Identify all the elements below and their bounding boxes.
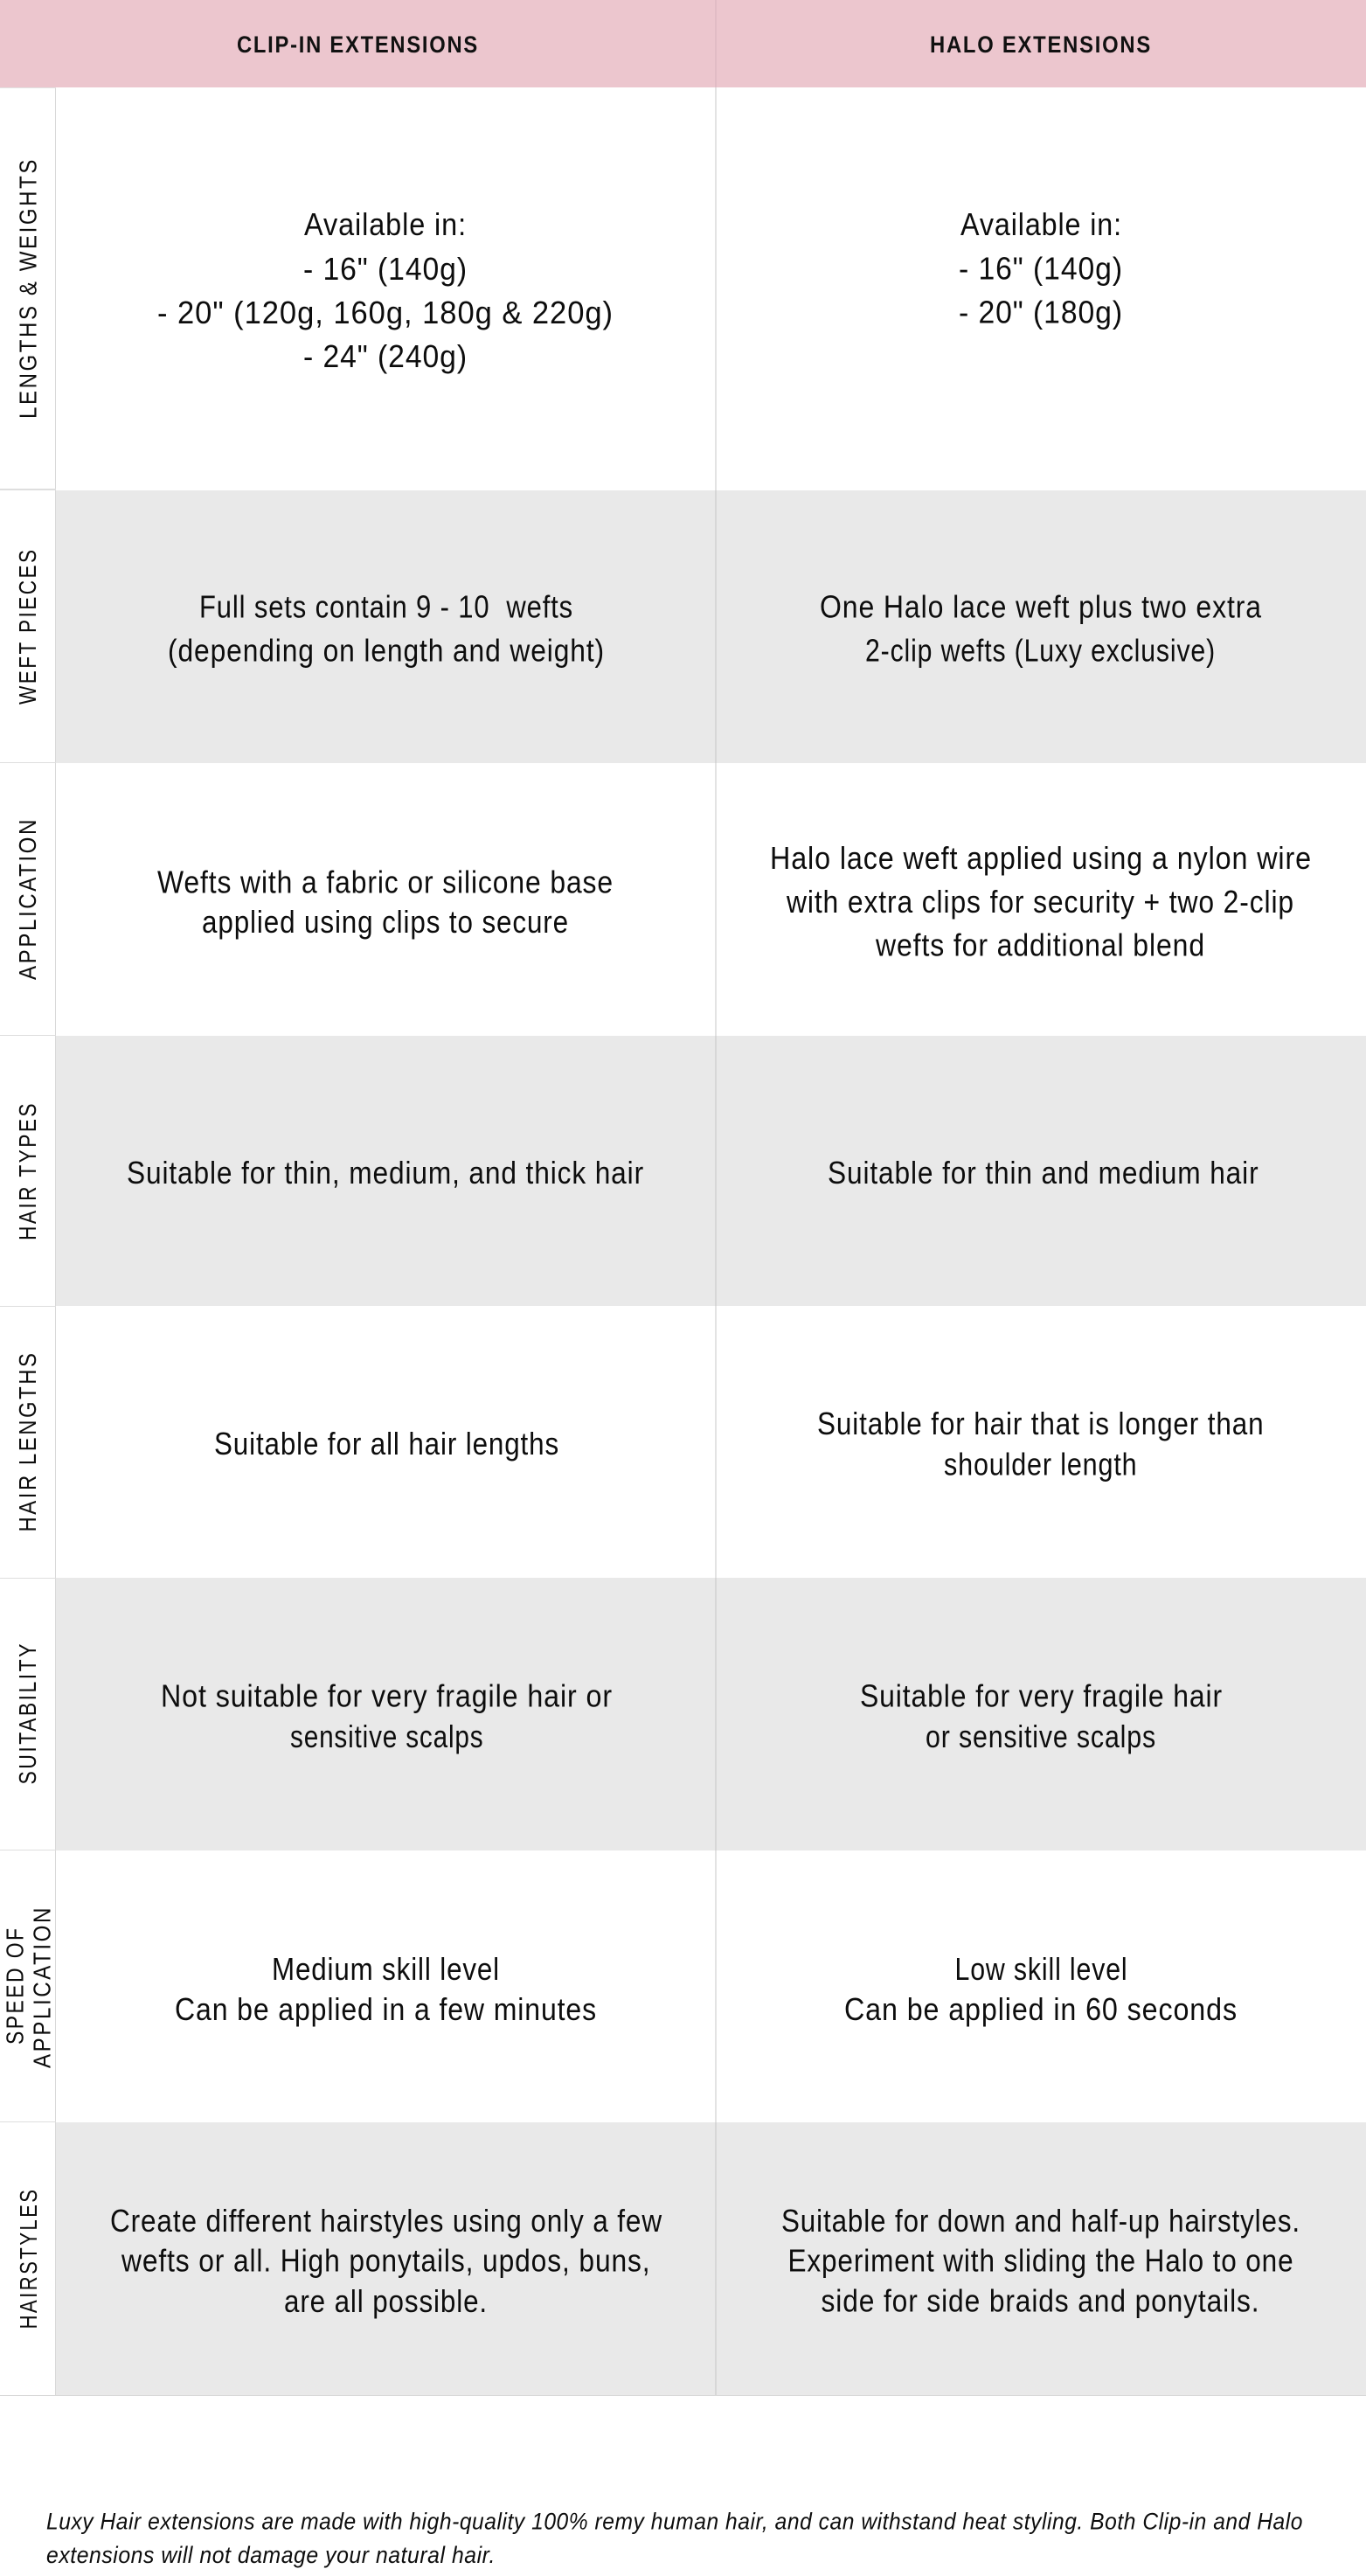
halo text: Suitable for very fragile hair <box>860 1678 1223 1713</box>
row label: APPLICATION <box>14 817 41 980</box>
halo text: One Halo lace weft plus two extra <box>820 589 1262 624</box>
halo text: Halo lace weft applied using a nylon wire <box>770 840 1312 876</box>
grey row backgrounds <box>56 490 1366 2395</box>
clip-in text: applied using clips to secure <box>202 904 569 940</box>
halo text: Available in: <box>960 206 1122 242</box>
clip-in text <box>168 589 605 668</box>
clip-in text <box>157 206 614 374</box>
row label: HAIR TYPES <box>14 1101 41 1240</box>
halo text: with extra clips for security + two 2-clip <box>786 884 1294 920</box>
halo text: Experiment with sliding the Halo to one <box>788 2243 1293 2278</box>
row label: LENGTHS & WEIGHTS <box>14 157 42 419</box>
row label: APPLICATION <box>28 1906 56 2068</box>
clip-in text <box>110 2203 662 2319</box>
halo text: 2-clip wefts (Luxy exclusive) <box>865 633 1216 668</box>
halo text: Suitable for hair that is longer than <box>817 1406 1264 1441</box>
halo text: or sensitive scalps <box>926 1718 1156 1754</box>
row: speed of application <box>2 1906 1238 2068</box>
heading: clip-in extensions: CLIP-IN EXTENSIONS <box>237 31 479 58</box>
row: weft pieces <box>14 547 1262 705</box>
halo text: shoulder length <box>944 1446 1138 1482</box>
row label: HAIRSTYLES <box>15 2187 42 2329</box>
halo text <box>817 1406 1264 1482</box>
clip-in text: Suitable for all hair lengths <box>214 1426 559 1462</box>
row: application <box>14 817 1312 980</box>
clip-in text <box>161 1678 613 1754</box>
halo text <box>959 206 1123 330</box>
row label: WEFT PIECES <box>14 547 41 705</box>
clip-in text: are all possible. <box>284 2283 488 2319</box>
clip-in text <box>175 1951 597 2027</box>
footnote: extensions will not damage your natural hair. <box>46 2542 496 2568</box>
row label <box>2 1906 56 2068</box>
halo text: Low skill level <box>954 1951 1127 1987</box>
halo text: side for side braids and ponytails. <box>822 2283 1260 2318</box>
clip-in text: - 24" (240g) <box>303 338 468 374</box>
halo text <box>781 2203 1300 2318</box>
clip-in text: sensitive scalps <box>290 1718 484 1754</box>
clip-in text: - 20" (120g, 160g, 180g & 220g) <box>157 295 614 330</box>
halo text: Suitable for thin and medium hair <box>828 1155 1259 1191</box>
row: hair lengths <box>14 1351 1264 1531</box>
halo text <box>820 589 1262 668</box>
halo text: - 20" (180g) <box>959 294 1123 330</box>
clip-in text: wefts or all. High ponytails, updos, buns, <box>121 2243 650 2278</box>
row: suitability <box>14 1642 1223 1785</box>
clip-in text: Available in: <box>304 206 467 242</box>
clip-in text: Full sets contain 9 - 10 wefts <box>199 589 573 624</box>
row: hairstyles <box>15 2187 1300 2329</box>
clip-in text: Can be applied in a few minutes <box>175 1991 597 2027</box>
halo text: Can be applied in 60 seconds <box>844 1991 1238 2027</box>
clip-in text: Suitable for thin, medium, and thick hair <box>127 1155 644 1191</box>
heading: halo extensions: HALO EXTENSIONS <box>930 31 1152 58</box>
clip-in text: (depending on length and weight) <box>168 633 605 668</box>
row label: HAIR LENGTHS <box>14 1351 41 1531</box>
clip-in text: - 16" (140g) <box>303 251 468 287</box>
clip-in text: Medium skill level <box>272 1951 500 1987</box>
row: lengths and weights <box>14 157 1123 419</box>
header band <box>0 0 1366 87</box>
halo text: Suitable for down and half-up hairstyles. <box>781 2203 1300 2239</box>
clip-in text: Wefts with a fabric or silicone base <box>157 864 614 900</box>
halo text <box>844 1951 1238 2027</box>
row label: SUITABILITY <box>14 1642 41 1785</box>
halo text <box>860 1678 1223 1754</box>
halo text: wefts for additional blend <box>875 927 1205 963</box>
clip-in text: Not suitable for very fragile hair or <box>161 1678 613 1713</box>
clip-in text <box>157 864 614 940</box>
halo text: - 16" (140g) <box>959 250 1123 287</box>
row label: SPEED OF <box>2 1927 28 2045</box>
halo text <box>770 840 1312 963</box>
clip-in text: Create different hairstyles using only a few <box>110 2203 662 2239</box>
footnote <box>46 2509 1303 2568</box>
row: hair types <box>14 1101 1259 1240</box>
